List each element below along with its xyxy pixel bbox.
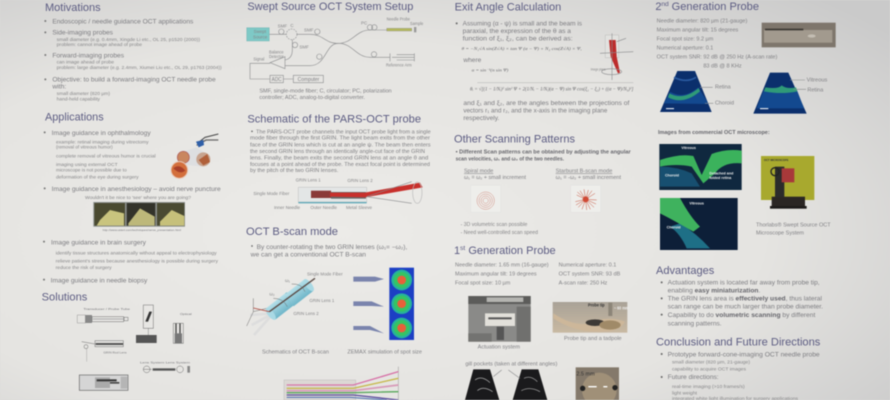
caption: abbreviations: SMF, single-mode fiber; C, circulator; PC, polarization [259, 88, 392, 94]
B-scan description: we can get a conventional OCT B-scan [250, 253, 366, 259]
prior probe designs diagrams: Optical [180, 312, 192, 316]
system setup schematic: ADC [272, 77, 282, 83]
probe description: by the pitch of the two GRIN lenses. [250, 168, 338, 174]
applications text list: microscope is not possible due to [56, 167, 127, 172]
advantages list: enabling easy miniaturization. [668, 287, 760, 294]
patterns intro [456, 149, 631, 162]
system setup schematic: Sample [410, 21, 424, 26]
system setup schematic: SMF [278, 24, 287, 29]
advantages list: The GRIN lens area is effectively used, thus lateral [668, 296, 823, 303]
probe description: focuses at a point ahead of the probe. The exact focal point is determined [250, 162, 430, 168]
panel: advantages [656, 265, 823, 327]
probe schematic diagram [253, 178, 423, 210]
applications text list: Image guidance in brain surgery [51, 239, 147, 246]
applications text list: Image guidance in anesthesiology – avoid nerve puncture [52, 186, 221, 193]
photo: Thorlabs microscope [756, 156, 831, 237]
system setup schematic: Needle Probe [387, 17, 410, 22]
derivation text: vectors r₁ and r₂, and the x-axis in the imaging plane [463, 108, 608, 115]
system setup schematic: SMF [304, 28, 314, 33]
spiral mode: ω₁ = ω₂ + small increment [464, 175, 527, 181]
probe description: The PARS-OCT probe channels the input OCT probe light from a single [256, 129, 431, 135]
photo: probe tip and tadpole: ~ 60 mm [614, 305, 629, 310]
probe description: the second GRIN lens through an identically angle-cut face of the GRIN [250, 149, 425, 155]
conclusion list: Future directions: [668, 374, 719, 381]
conclusion list [661, 351, 820, 400]
B-scan cylinder schematic [247, 272, 343, 335]
panel: conclusion and future directions [656, 337, 821, 400]
specifications: OCT system SNR: 93 dB [559, 272, 621, 278]
applications text list: deformation of the eye during surgery [56, 174, 139, 179]
motivations text list: Endoscopic / needle guidance OCT applications [52, 19, 194, 26]
advantages list: Actuation system is located far away from probe tip, [668, 280, 820, 287]
photo: actuation system [468, 296, 531, 351]
probe description [250, 129, 431, 174]
B-scan cylinder schematic: ω₁ [285, 278, 291, 283]
advantages list [661, 280, 823, 327]
probe schematic diagram: GRIN Lens 1 [296, 178, 321, 183]
system setup schematic: SMF [299, 45, 309, 50]
system setup schematic: PC [361, 20, 368, 25]
probe description: face of the GRIN lens which is cut at an angle ψ. The beam then enters [250, 143, 431, 149]
conclusion list: real-time imaging (>10 frames/s) [672, 384, 745, 389]
probe schematic diagram: Inner Needle [274, 205, 300, 210]
starburst B-scan mode: Starburst B-scan mode [556, 168, 612, 174]
panel: OCT B-scan mode [246, 226, 422, 400]
derivation text: respectively. [463, 115, 499, 122]
image source url: http://www.usteri.com/techniques/nerve_presentation.html [103, 228, 181, 232]
subheading: commercial microscope images: Images from commercial OCT microscope: [658, 130, 770, 136]
prior probe designs diagrams: Lens System Lens System [140, 360, 191, 364]
heading: Solutions: Solutions [42, 292, 88, 304]
conclusion list: small diameter (820 µm, 21-gauge) [672, 360, 751, 365]
tadpole OCT images [465, 362, 558, 400]
applications text list: identify tissue structures anatomically without appeal to electrophysiology [56, 250, 217, 255]
specifications: Focal spot size: 9.2 µm [657, 36, 714, 42]
exit angle diagram: Image plane [591, 67, 606, 71]
motivations text list: problem: large diameter (e.g. 2.4mm, Xiumei Liu etc., OL 29, p1763 (2004)) [57, 65, 222, 70]
OCT image: vitreous and choroid: Vitreous [689, 201, 704, 205]
applications text list: (removal of vitreous humor) [56, 145, 113, 150]
motivations text list: can image ahead of probe [57, 59, 115, 64]
panel: 2nd generation probe [655, 1, 836, 250]
captions [262, 349, 422, 355]
B-scan cylinder schematic: GRIN Lens 1 [309, 298, 335, 303]
photo: actuation system: Actuation system [478, 345, 521, 351]
applications text list: Wouldn't it be nice to 'see' where you are going? [85, 195, 192, 200]
specifications: Numerical aperture: 0.1 [657, 45, 713, 51]
OCT image: vitreous and choroid: Choroid [667, 225, 681, 229]
spiral mode [464, 168, 527, 212]
advantages list: scan range can be much larger than probe diameter. [668, 304, 823, 311]
panel: exit angle calculation [455, 1, 633, 122]
panel: other scanning patterns [454, 133, 631, 236]
derivation text: θ = −N₁√A sin(Z√A) × tan Ψ (α − Ψ) + N₂ cos(Z√A) × Ψ, [462, 46, 582, 52]
heading: 1st generation: 1 [454, 245, 460, 257]
OCT image: detached retina: Choroid [665, 174, 679, 178]
specifications: Needle diameter: 820 µm (21-gauge) [657, 18, 748, 24]
prior probe designs diagrams [77, 305, 192, 390]
caption: abbreviations: controller; ADC, analog-to-digital converter. [259, 95, 365, 101]
heading: Applications: Applications [45, 112, 104, 124]
motivations text list: small diameter (820 µm) [57, 91, 111, 96]
derivation text: θᵢ = √[(1 − 1/Nᵢ)² sin² Ψ + 2(1/Nᵢ − 1/Nᵢ)(α − Ψ) sin Ψ cos(ξ₁ − ξ₂) + ((α − Ψ)/N₀)²] [470, 87, 633, 93]
starburst B-scan mode [556, 168, 622, 212]
derivation text: and ξ₁ and ξ₂, are the angles between the projections of [463, 100, 629, 107]
B-scan description [250, 245, 408, 259]
system setup schematic [247, 17, 424, 83]
heading: 1st generation: st [460, 245, 465, 252]
OCT retina images: Retina [807, 88, 823, 94]
system setup schematic: Balance [269, 49, 284, 54]
specifications: Needle diameter: 1.65 mm (16-gauge) [455, 263, 549, 269]
pattern notes [461, 222, 538, 236]
panel: swept source OCT system setup [247, 1, 424, 101]
derivation text: Assuming (α - ψ) is small and the beam is [463, 20, 583, 27]
probe schematic diagram: Metal Sleeve [346, 205, 372, 210]
specifications: Focal spot size: 10 µm [455, 281, 511, 287]
specifications: Numerical aperture: 0.1 [559, 263, 616, 269]
motivations text list: Side-imaging probes [52, 30, 114, 37]
motivations text list [44, 19, 222, 102]
probe schematic diagram: Single Mode Fiber [253, 191, 290, 196]
photo: second generation probe [762, 23, 836, 47]
heading: conclusion: Conclusion and Future Directions [656, 337, 821, 349]
applications text list: reduce the risk of surgery [56, 265, 112, 270]
derivation text [456, 20, 633, 122]
patterns intro: scan velocities, ω₁ and ω₂ of the two needles. [456, 156, 564, 162]
icon: eye surgery illustration [171, 134, 218, 178]
panel: motivations [44, 2, 222, 102]
applications text list: imaging using external OCT [56, 162, 118, 167]
heading: advantages: Advantages [656, 265, 715, 277]
heading: patterns: Other Scanning Patterns [454, 133, 575, 145]
heading: Motivations: Motivations [45, 2, 101, 14]
pattern notes: - Need well-controlled scan speed [461, 230, 538, 236]
OCT retina images [660, 71, 828, 114]
captions: Schematics of OCT B-scan [262, 349, 329, 355]
OCT image: vitreous and choroid [660, 198, 738, 250]
derivation text: where [462, 57, 482, 64]
specifications: Maximum angular tilt: 15 degrees [657, 27, 739, 33]
applications text list: relieve patient's stress because anesthesiology is possible during surgery [56, 258, 219, 263]
probe schematic diagram: GRIN Lens 2 [347, 178, 373, 183]
derivation text: function of ξ₁, ξ₂, can be derived as: [463, 36, 573, 43]
applications text list: Image guidance in ophthalmology [52, 130, 151, 137]
B-scan description: By counter-rotating the two GRIN lenses (ω₁= −ω₂), [257, 245, 408, 251]
nerve puncture video frames [93, 202, 185, 227]
photo: tadpole with scale: 2.5 mm [576, 371, 595, 377]
motivations text list: Forward-imaging probes [52, 52, 125, 59]
advantages list: scanning patterns. [668, 320, 722, 327]
OCT image: detached retina [659, 144, 742, 190]
motivations text list: hand-held capability [57, 97, 101, 102]
heading: 1st generation: Generation Probe [468, 245, 556, 257]
probe schematic diagram: Outer Needle [310, 205, 337, 210]
motivations text list: problem: cannot image ahead of probe [57, 42, 143, 47]
applications text list: complete removal of vitreous humor is crucial [56, 153, 156, 158]
conclusion list: light weight [672, 391, 698, 396]
heading: 2nd generation: 2 [655, 1, 661, 13]
heading: system setup: Swept Source OCT System Setup [247, 1, 413, 13]
ZEMAX ray traces and spot maps [353, 268, 414, 340]
motivations text list: small diameter (e.g. 0.4mm, Xingde Li etc., OL 25, p1520 (2000)) [57, 37, 201, 42]
prior probe designs diagrams: Transducer / Probe Tube [83, 307, 131, 311]
heading: PARS-OCT probe: Schematic of the PARS-OCT probe [247, 114, 421, 126]
patterns intro: • Different Scan patterns can be obtained by adjusting the angular [456, 149, 631, 155]
OCT image: detached retina: Vitreous [681, 146, 696, 150]
specifications [657, 18, 778, 70]
motivations text list: with: [51, 84, 66, 91]
system setup schematic: Signal [253, 57, 264, 62]
B-scan cylinder schematic: GRIN Lens 2 [293, 311, 319, 316]
specifications: 83 dB @ 8 KHz [703, 64, 742, 70]
panel: applications [43, 112, 221, 284]
exit angle diagram [591, 33, 633, 80]
panel: 1st generation probe [454, 245, 629, 400]
conclusion list: Prototype forward-cone-imaging OCT needle probe [668, 351, 820, 358]
motivations text list: Objective: to build a forward-imaging OCT needle probe [52, 77, 216, 84]
derivation text: paraxial, the expression of the θ as a [463, 28, 571, 35]
specifications: OCT system SNR: 92 dB @ 250 Hz (A-scan rate) [657, 54, 778, 60]
applications text list [43, 130, 221, 284]
OCT retina images: Choroid [715, 101, 734, 107]
derivation text: α = sin⁻¹(n sin Ψ) [472, 67, 509, 72]
prior probe designs diagrams: GRIN Rod Lens [103, 350, 128, 354]
conclusion list: capability to acquire OCT images [672, 367, 747, 372]
photo: probe tip and tadpole: Probe tip and a tadpole [564, 336, 622, 342]
OCT retina images: Vitreous [807, 77, 828, 83]
rainbow ray trace [284, 367, 398, 400]
photo: Thorlabs microscope: OCT MICROSCOPE [764, 158, 789, 162]
photo: tadpole with scale [576, 367, 619, 400]
advantages list: Capability to do volumetric scanning by different [668, 312, 815, 319]
heading: B-scan: OCT B-scan mode [246, 226, 338, 238]
applications text list: Image guidance in needle biopsy [51, 277, 148, 284]
OCT image: detached retina: Detached and [709, 171, 733, 175]
pattern notes: - 3D volumetric scan possible [461, 222, 528, 228]
system setup schematic: Source [253, 35, 268, 40]
starburst B-scan mode: ω₁ = -ω₂ + small increment [556, 175, 622, 181]
heading: 2nd generation: Generation Probe [672, 1, 759, 13]
system setup schematic: C [290, 23, 294, 28]
photo: Thorlabs microscope: Microscope System [756, 231, 805, 237]
system setup schematic: Computer [298, 77, 320, 83]
panel: solutions [42, 292, 192, 390]
tadpole OCT images: gill pockets (taken at different angles) [465, 362, 558, 368]
panel: schematic of the PARS-OCT probe [247, 114, 431, 210]
probe description: lens. Finally, the beam exits the second GRIN lens at an angle θ and [250, 155, 428, 161]
system setup schematic: Reference Arm [386, 63, 412, 68]
captions: ZEMAX simulation of spot size [347, 349, 422, 355]
B-scan cylinder schematic: ω₂ [269, 291, 275, 296]
heading: exit angle: Exit Angle Calculation [455, 1, 561, 13]
photo: Thorlabs microscope: Thorlabs® Swept Source OCT [756, 222, 831, 229]
specifications: Maximum angular tilt: 19 degrees [455, 272, 537, 278]
spiral mode: Spiral mode [464, 168, 493, 174]
system setup schematic: Swept [254, 29, 267, 34]
applications text list: example: retinal imaging during vitrectomy [56, 140, 149, 145]
heading: 2nd generation: nd [661, 1, 669, 8]
OCT image: detached retina: folded retina [709, 176, 732, 180]
specifications: A-scan rate: 250 Hz [559, 281, 608, 287]
caption: abbreviations [259, 88, 392, 101]
OCT retina images: Retina [715, 85, 731, 91]
photo: probe tip and tadpole: Probe tip [588, 303, 605, 308]
photo: probe tip and tadpole [553, 302, 629, 342]
system setup schematic: Detector [269, 54, 284, 59]
specifications [455, 263, 621, 287]
B-scan cylinder schematic: Single Mode Fiber [307, 272, 343, 277]
probe description: mode fiber through the first GRIN. The light beam exits from the other [250, 136, 430, 142]
